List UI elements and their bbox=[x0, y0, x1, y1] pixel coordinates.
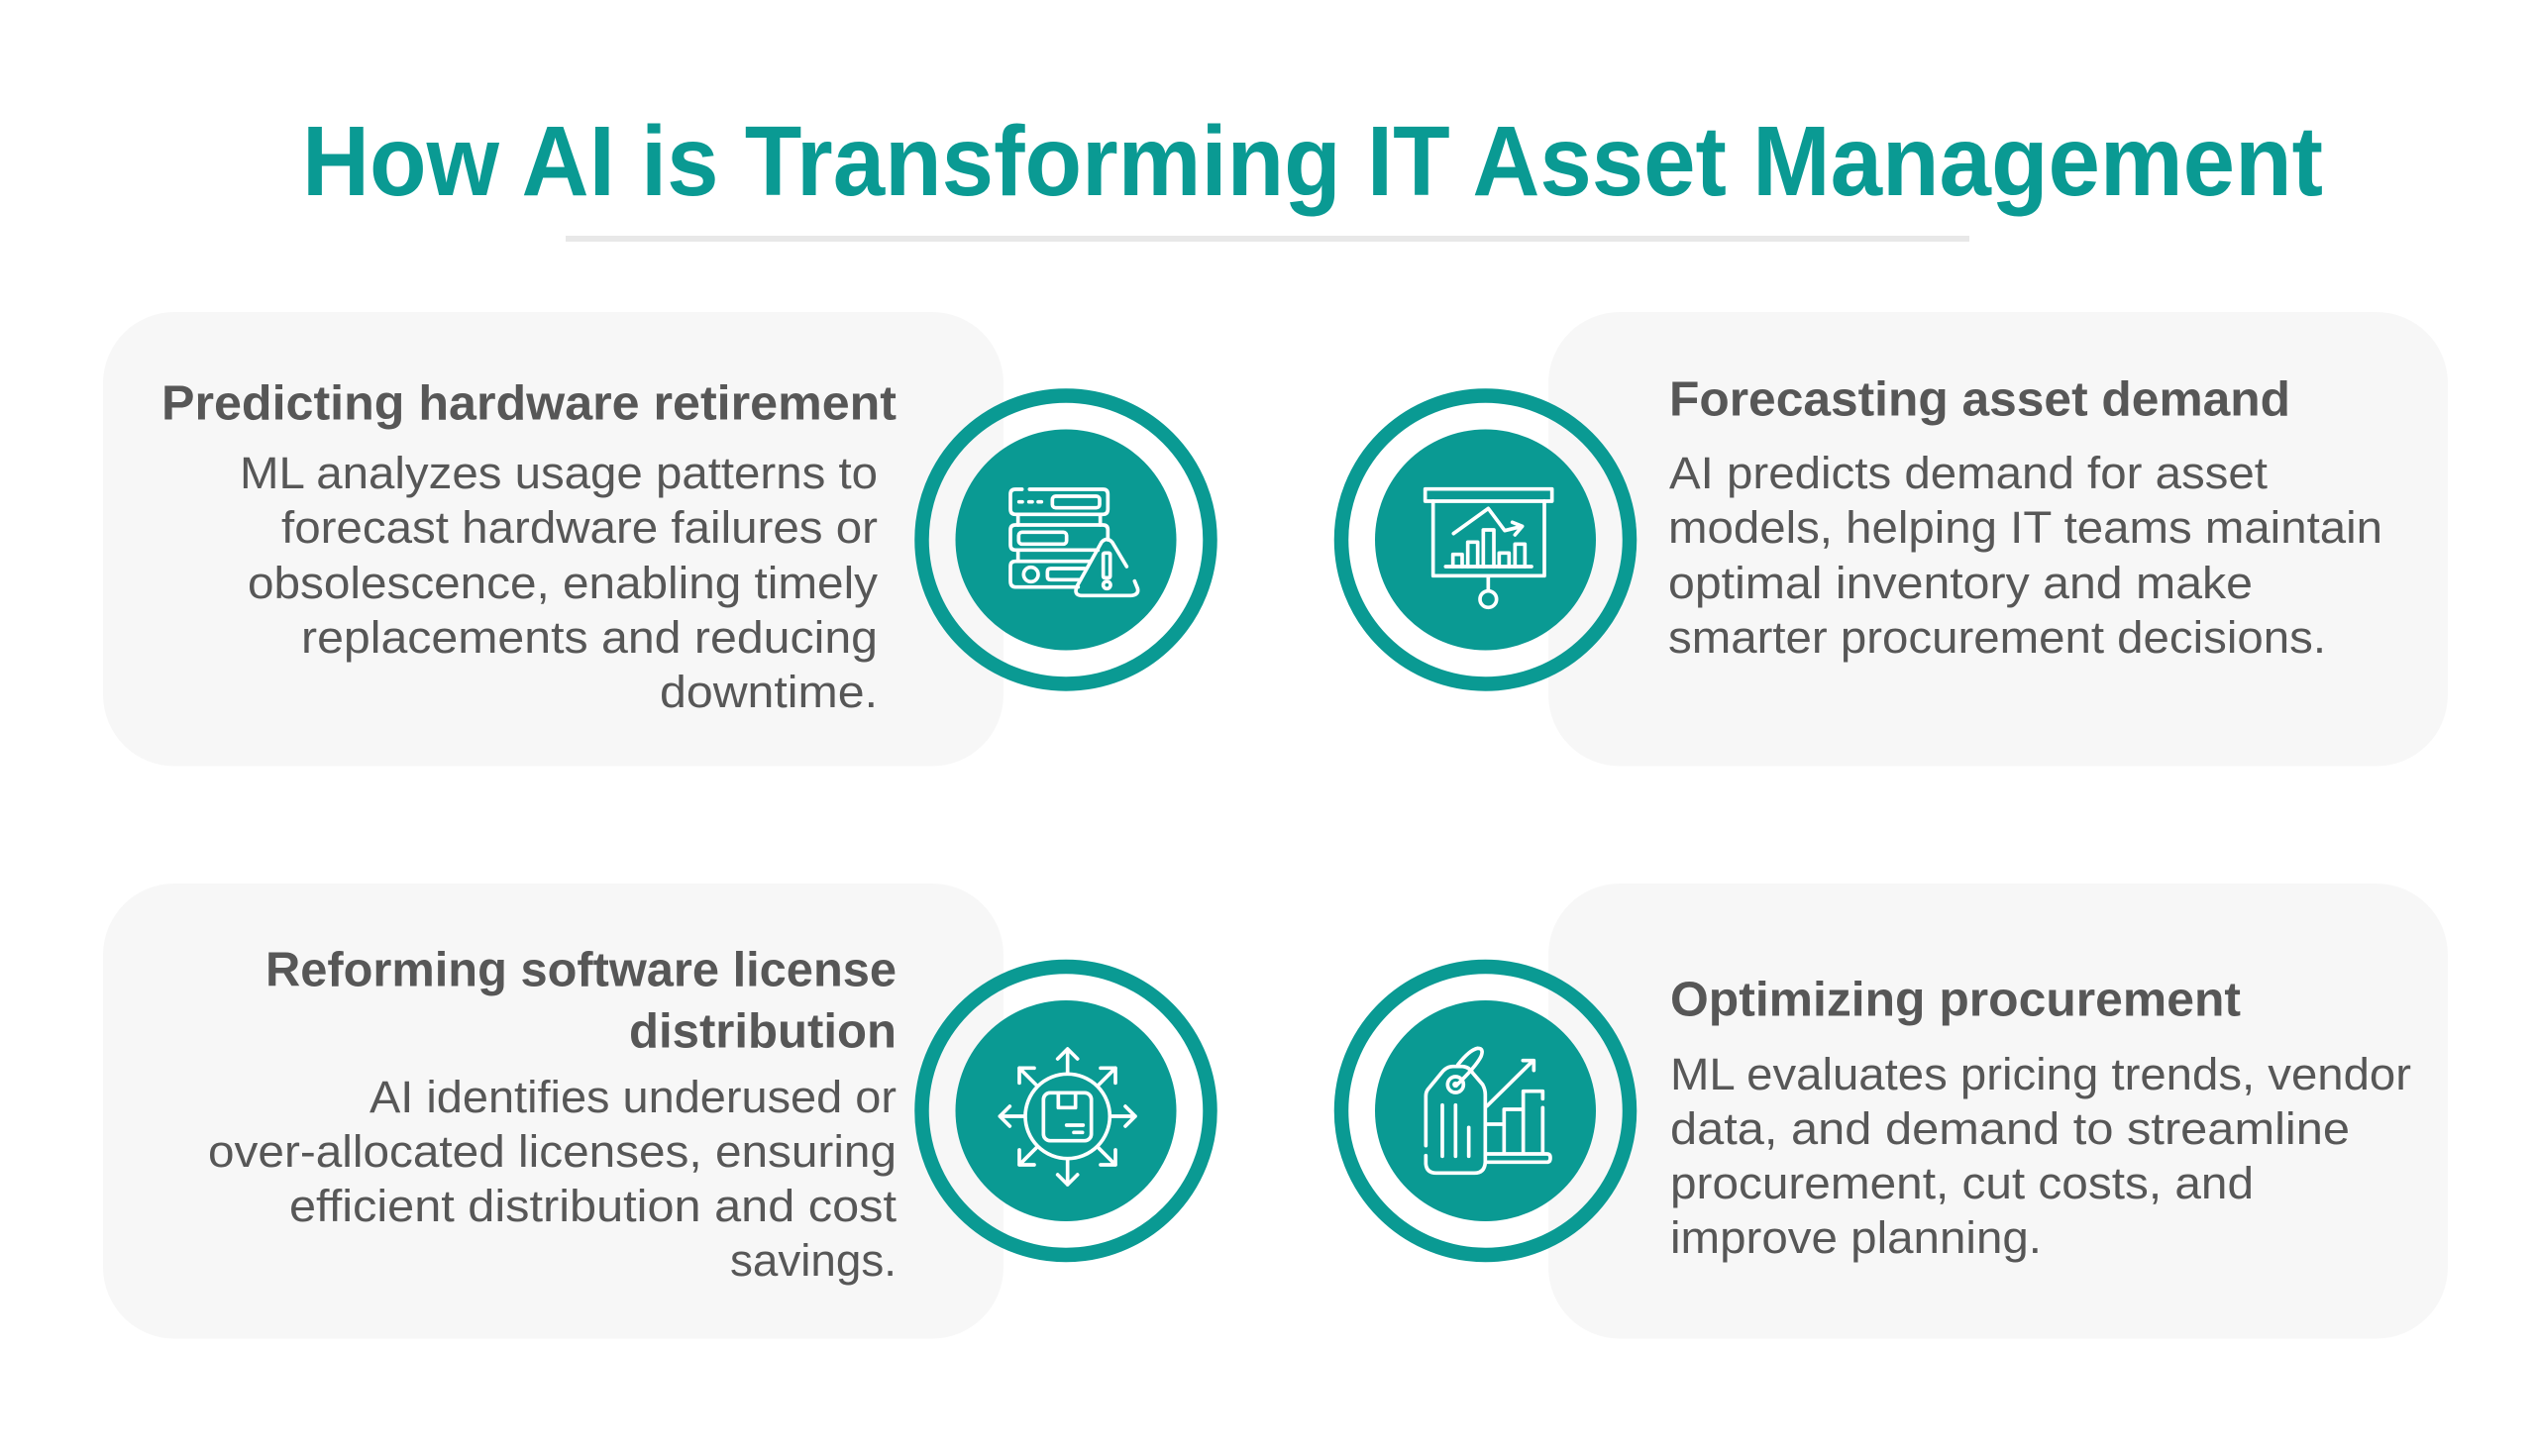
body text bbox=[1670, 1049, 2411, 1263]
card background bbox=[103, 312, 1004, 767]
icon: server stack with warning triangle bbox=[921, 396, 1211, 683]
icon: box with arrows outward bbox=[921, 967, 1211, 1255]
card background bbox=[1548, 312, 2448, 767]
body text: improve planning. bbox=[1670, 1212, 2042, 1263]
body text: downtime. bbox=[660, 667, 878, 717]
body text: efficient distribution and cost bbox=[289, 1181, 898, 1231]
heading: Reforming software license bbox=[265, 943, 897, 996]
heading: Forecasting asset demand bbox=[1669, 372, 2290, 426]
body text bbox=[208, 1072, 898, 1286]
body text: AI predicts demand for asset bbox=[1669, 448, 2269, 498]
card background bbox=[103, 884, 1004, 1339]
body text: data, and demand to streamline bbox=[1670, 1103, 2350, 1154]
body text: AI identifies underused or bbox=[370, 1072, 897, 1122]
body text: over-allocated licenses, ensuring bbox=[208, 1126, 897, 1177]
body text bbox=[1668, 448, 2382, 663]
body text: ML analyzes usage patterns to bbox=[240, 448, 878, 498]
icon: presentation board with chart bbox=[1341, 396, 1630, 683]
heading: distribution bbox=[629, 1004, 897, 1058]
body text: models, helping IT teams maintain bbox=[1668, 502, 2382, 553]
panel: reforming software license distribution bbox=[103, 884, 1211, 1339]
body text: forecast hardware failures or bbox=[281, 502, 878, 553]
heading: Optimizing procurement bbox=[1670, 973, 2241, 1026]
panel: optimizing procurement bbox=[1341, 884, 2448, 1339]
body text: replacements and reducing bbox=[301, 612, 878, 663]
body text: procurement, cut costs, and bbox=[1670, 1158, 2254, 1208]
heading: Predicting hardware retirement bbox=[161, 376, 897, 430]
card background bbox=[1548, 884, 2448, 1339]
title: How AI is Transforming IT Asset Management bbox=[302, 106, 2323, 217]
body text: ML evaluates pricing trends, vendor bbox=[1670, 1049, 2411, 1099]
heading bbox=[265, 943, 897, 1058]
body text bbox=[240, 448, 879, 717]
panel: predicting hardware retirement bbox=[103, 312, 1211, 767]
body text: obsolescence, enabling timely bbox=[248, 558, 879, 608]
body text: savings. bbox=[730, 1235, 897, 1286]
icon: price tag with rising bar chart bbox=[1341, 967, 1630, 1255]
body text: optimal inventory and make bbox=[1668, 558, 2253, 608]
body text: smarter procurement decisions. bbox=[1668, 612, 2326, 663]
panel: forecasting asset demand bbox=[1341, 312, 2448, 767]
